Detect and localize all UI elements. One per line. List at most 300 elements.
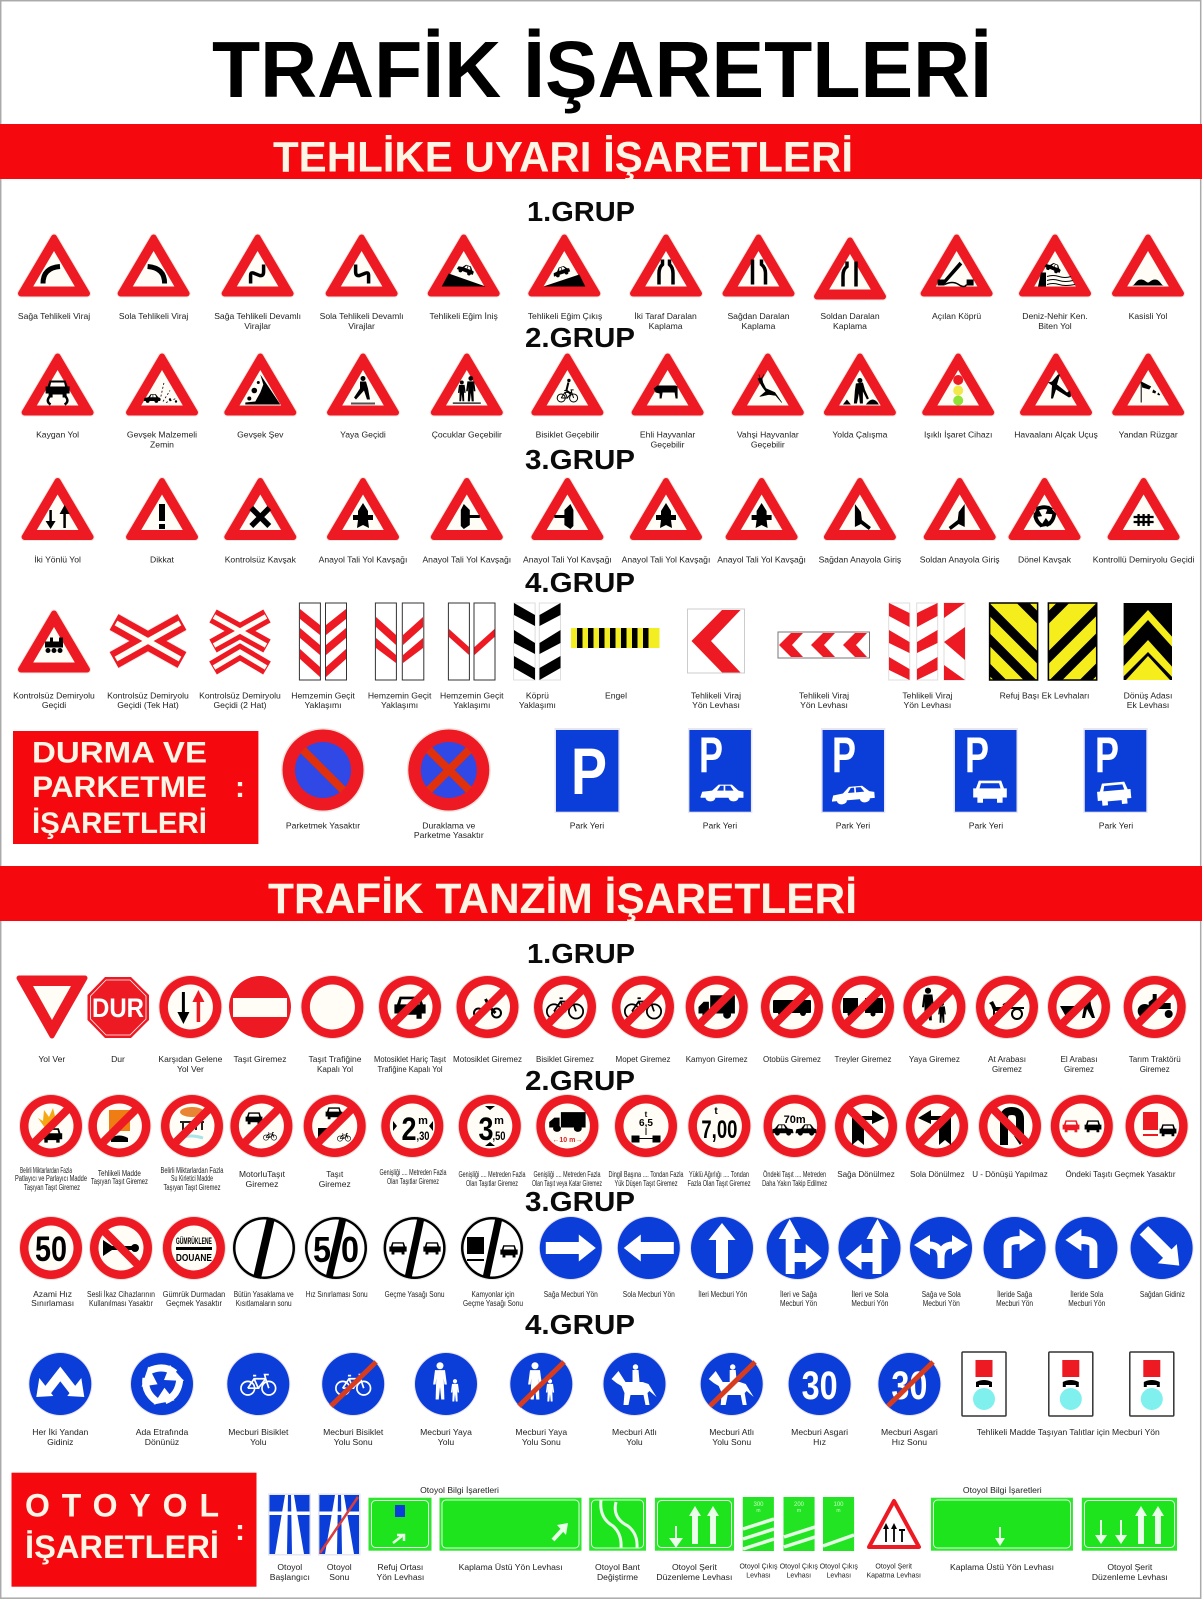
sign: Öndeki Taşıtı Geçmek Yasaktır (2) [1125,1094,1189,1158]
sign: Tehlikeli Eğim İniş: Tehlikeli Eğim İniş [430,311,498,321]
heading: 3.GRUP: 3.GRUP [525,444,635,475]
sign: Mecburi Asgari Hız Sonu [877,1352,941,1447]
sign: Mopet Giremez: Mopet Giremez [616,1054,670,1064]
sign: Sesli İkaz Cihazları Yasak: Sesli İkaz Cihazlarının [87,1289,155,1299]
sign: Sağa Tehlikeli Devamlı Virajlar [214,238,301,331]
sign: Otoyol Çıkış Levhası 200 m: Levhası [787,1572,811,1580]
sign: At Arabası Giremez: At Arabası [988,1054,1026,1064]
sign: Motosiklet Giremez [453,975,522,1064]
sign: Yüksekliği 3,50 m: 3 [478,1111,494,1147]
sign: Yüksekliği 3,50 m [458,1094,526,1188]
sign: Park Yeri, P only [554,728,620,830]
sign: Tarım Traktörü Giremez: Tarım Traktörü [1129,1054,1181,1064]
sign: Açılan Köprü: Açılan Köprü [932,311,981,321]
sign: Uzunluğu 10 m: ←10 m→ [552,1137,582,1144]
sign: Bütün Yasaklama ve Kısıtlamaların Sonu [232,1216,296,1308]
sign: İleride Sağa Mecburi Yön [983,1216,1047,1308]
sign: Soldan Daralan Kaplama: Soldan Daralan [820,311,880,321]
sign: Anayol Tali Yol Kavşağı: Anayol Tali Yol Kavşağı [622,554,710,564]
sign: Gevşek Malzemeli Zemin: Zemin [150,440,174,450]
sign: Gevşek Şev [227,356,293,440]
sign: İleri ve Sağa Mecburi Yön: İleri ve Sağa [780,1289,817,1299]
sign: Mecburi Asgari Hız: 30 [802,1364,838,1408]
sign: Patlayıcı ve Parlayıcı Madde: Taşıyan Taşıt Giremez [24,1183,80,1192]
sign: Otoyol Sonu: Sonu [329,1572,350,1582]
sign: Motosiklet Hariç Taşıt Trafiğine Kapalı Yol: Motosiklet Hariç Taşıt [374,1054,447,1064]
sign: Kamyonlar için Geçme Yasağı Sonu [460,1216,524,1308]
sign: Otoyol Çıkış Levhası 100 m: m [836,1508,841,1514]
sign: Kontrolsüz Demiryolu Geçidi: Geçidi [42,700,66,710]
sign: Her İki Yandan Gidiniz [28,1352,92,1447]
sign: Otoyol Çıkış Levhası 300 m: m [756,1508,761,1514]
sign: Parketmek Yasaktır [281,728,365,830]
sign: Mecburi Atlı Yolu Sonu [700,1352,764,1447]
banner: Tehlike Uyarı İşaretleri [0,124,1202,182]
sign: Hız Sınırlaması Sonu: Hız Sınırlaması Sonu [306,1289,368,1299]
sign: Park Yeri, car side tilted: P [832,727,856,783]
sign: Otoyol Şerit Düzenleme Levhası, right [1082,1498,1177,1582]
sign: Yolda Çalışma [827,356,893,440]
sign: Tehlikeli Viraj Yön Levhası, vertical [889,603,965,710]
sign: Karşıdan Gelene Yol Ver [158,975,223,1074]
sign: Kontrolsüz Kavşak: Kontrolsüz Kavşak [225,554,297,564]
sign: Dur: DUR [92,993,144,1023]
sign: Sağa Dönülmez [834,1094,898,1179]
sign: İki Yönlü Yol: İki Yönlü Yol [34,554,81,564]
sign: Duraklama ve Parketme Yasaktır [407,728,491,840]
sign: Sola Dönülmez [905,1094,969,1179]
sign: Karşıdan Gelene Yol Ver: Yol Ver [177,1064,204,1074]
sign: Gümrük Durmadan Geçmek Yasaktır [162,1216,226,1308]
sign: Sola Dönülmez: Sola Dönülmez [910,1169,965,1179]
sign: Tarım Traktörü Giremez [1123,975,1187,1074]
sign: Sola Tehlikeli Devamlı Virajlar: Virajlar [348,321,375,331]
sign: Kontrollü Demiryolu Geçidi: Kontrollü Demiryolu Geçidi [1093,554,1195,564]
heading: 4.GRUP: 4.GRUP [525,567,635,598]
sign: Anayol Tali Yol Kavşağı: Anayol Tali Yol Kavşağı [717,554,806,564]
sign: Sağdan Gidiniz: Sağdan Gidiniz [1140,1289,1185,1299]
sign: Kontrolsüz Demiryolu Geçidi [13,614,95,710]
sign: Anayol Tali Yol Kavşağı [319,481,407,564]
label: Otoyol Bilgi İşaretleri: Otoyol Bilgi İşaretleri [420,1485,499,1495]
sign: Kaygan Yol: Kaygan Yol [36,430,79,440]
sign: Hemzemin Geçit Yaklaşımı, 1 stripe: Yaklaşımı [453,700,490,710]
sign: Mecburi Atlı Yolu Sonu: Yolu Sonu [712,1437,751,1447]
sign: Ehli Hayvanlar Geçebilir: Ehli Hayvanlar [640,430,695,440]
sign: Parketmek Yasaktır: Parketmek Yasaktır [286,820,360,830]
sign: Tehlikeli Viraj Yön Levhası, wide: Yön Levhası [800,700,848,710]
sign: Yaya Giremez: Yaya Giremez [909,1054,960,1064]
sign: Her İki Yandan Gidiniz: Gidiniz [47,1437,73,1447]
sign: Otoyol Sonu [318,1494,360,1582]
sign: Uzunluğu 10 m: Genişliği .... Metreden Fazla [534,1170,601,1179]
sign: İki Taraf Daralan Kaplama: Kaplama [649,321,683,331]
sign: Yaya Geçidi: Yaya Geçidi [340,430,386,440]
sign: At Arabası Giremez [975,975,1039,1074]
sign: Sağdan Daralan Kaplama: Kaplama [742,321,776,331]
heading: 1.GRUP: 1.GRUP [527,938,635,969]
sign: Motorlu Taşıt Giremez: MotorluTaşıt [239,1169,286,1179]
sign: Deniz-Nehir Ken. Biten Yol: Biten Yol [1038,321,1072,331]
sign: Park Yeri, P only: Park Yeri [570,820,604,830]
sign: Sağa ve Sola Mecburi Yön: Sağa ve Sola [922,1289,961,1299]
sign: Bisiklet Giremez [533,975,597,1064]
sign: Mecburi Bisiklet Yolu Sonu: Yolu Sonu [334,1437,373,1447]
sign: Patlayıcı ve Parlayıcı Madde [15,1094,87,1192]
sign: Mecburi Yaya Yolu: Mecburi Yaya [420,1427,472,1437]
sign: İleri Mecburi Yön: İleri Mecburi Yön [698,1289,747,1299]
sign: Tarım Traktörü Giremez: Giremez [1140,1064,1170,1074]
sign: Ehli Hayvanlar Geçebilir [635,356,701,450]
sign: Deniz-Nehir Ken. Biten Yol [1022,238,1088,331]
sign: Mecburi Yaya Yolu Sonu: Mecburi Yaya [515,1427,567,1437]
sign: Mecburi Bisiklet Yolu Sonu [321,1352,385,1447]
sign: Otoyol Çıkış Levhası 200 m: Otoyol Çıkış [780,1564,818,1570]
sign: Refüj Ortası Yön Levhası [368,1498,432,1582]
sign: Mecburi Yaya Yolu Sonu [509,1352,573,1447]
sign: Dingil Başına 6,5 t: Dingil Başına .... Tondan Fazla [608,1170,684,1179]
sign: Kasisli Yol [1115,238,1181,321]
sign: Havaalanı Alçak Uçuş [1014,356,1098,440]
sign: Kontrolsüz Demiryolu Geçidi (Tek Hat): Kontrolsüz Demiryolu [107,690,189,700]
sign: Köprü Yaklaşımı: Köprü [526,690,549,700]
sign: Yüklü Ağırlığı 7,00 t [687,1094,751,1188]
sign: Otoyol Çıkış Levhası 300 m: Otoyol Çıkış [739,1564,778,1570]
sign: Otoyol Sonu: Otoyol [327,1562,352,1572]
sign: Taşıt Giremez: Taşıt Giremez [234,1054,286,1064]
sign: Yandan Rüzgar [1115,356,1181,440]
sign: Refuj Başı Ek Levhaları [988,602,1098,700]
sign: Bisiklet Geçebilir [534,356,600,440]
sign: Patlayıcı ve Parlayıcı Madde: Belirli Miktarlardan Fazla [20,1166,72,1175]
sign: Yandan Rüzgar: Yandan Rüzgar [1119,430,1178,440]
sign: Motosiklet Hariç Taşıt Trafiğine Kapalı Yol: Trafiğine Kapalı Yol [378,1064,443,1074]
sign: Treyler Giremez [831,975,895,1064]
sign: Otoyol Çıkış Levhası 300 m [739,1497,778,1580]
sign: Takip mesafesi 70 m [762,1094,827,1188]
sign: Azami Hız Sınırlaması: Azami Hız [33,1289,72,1299]
sign: Bisiklet Giremez: Bisiklet Giremez [536,1054,594,1064]
heading: 2.GRUP: 2.GRUP [525,322,635,353]
panel: Durma ve Parketme İşaretleri: DURMA VE [32,737,207,770]
sign: Yol Ver [19,978,85,1064]
sign: Park Yeri, car front tilted: Park Yeri [1099,820,1133,830]
sign: Su Kirletici Madde [160,1094,224,1192]
sign: Otoyol Çıkış Levhası 200 m [780,1497,818,1580]
sign: İleri Mecburi Yön [690,1216,754,1299]
sign: Genişliği 2,30 m: m [418,1115,428,1127]
sign: Kontrollü Demiryolu Geçidi [1093,481,1195,564]
sign: Hemzemin Geçit Yaklaşımı, 3 stripes [291,603,355,710]
sign: Anayol Tali Yol Kavşağı: Anayol Tali Yol Kavşağı [523,554,612,564]
sign: Sağa Mecburi Yön [539,1216,603,1299]
sign: Kontrolsüz Demiryolu Geçidi (2 Hat): Kontrolsüz Demiryolu [199,690,281,700]
sign: Park Yeri, car side tilted: Park Yeri [836,820,870,830]
sign: Kontrolsüz Demiryolu Geçidi (Tek Hat): Geçidi (Tek Hat) [117,700,179,710]
sign: Sağdan Daralan Kaplama: Sağdan Daralan [727,311,790,321]
sign: Kontrolsüz Demiryolu Geçidi (Tek Hat) [107,622,189,710]
sign: Kamyonlar için Geçme Yasağı Sonu: Geçme Yasağı Sonu [463,1298,523,1308]
sign: Hız Sınırlaması Sonu: 0 [341,1229,359,1270]
sign: Yüklü Ağırlığı 7,00 t: Yüklü Ağırlığı .... Tondan [689,1170,749,1179]
sign: Taşıt Giremez, with tractor: Taşıt [326,1169,344,1179]
sign: Kontrolsüz Demiryolu Geçidi: Kontrolsüz Demiryolu [13,690,95,700]
sign: Taşıt Giremez, with tractor [303,1094,367,1189]
sign: Çocuklar Geçebilir [432,356,502,440]
sign: Mecburi Asgari Hız [788,1352,852,1447]
sign: Vahşi Hayvanlar Geçebilir: Vahşi Hayvanlar [737,430,799,440]
sign: Çocuklar Geçebilir: Çocuklar Geçebilir [432,430,502,440]
sign: Yüksekliği 3,50 m: Olan Taşıtlar Giremez [466,1179,518,1188]
panel: Otoyol İşaretleri: OTOYOL [25,1488,219,1524]
sign: Deniz-Nehir Ken. Biten Yol: Deniz-Nehir Ken. [1022,311,1088,321]
panel: Durma ve Parketme İşaretleri: İŞARETLERİ [32,807,207,840]
sign: Kontrolsüz Demiryolu Geçidi (2 Hat): Geçidi (2 Hat) [213,700,267,710]
sign: Gevşek Malzemeli Zemin [127,356,197,450]
sign: El Arabası Giremez: El Arabası [1060,1054,1098,1064]
sign: Refuj Başı Ek Levhaları: Refuj Başı Ek Levhaları [1000,690,1089,700]
sign: Duraklama ve Parketme Yasaktır: Parketme Yasaktır [414,830,484,840]
sign: İleride Sağa Mecburi Yön: İleride Sağa [997,1289,1032,1299]
sign: Dingil Başına 6,5 t [608,1094,684,1188]
sign: Tehlikeli Madde Taşıyan Taşıt Giremez: Taşıyan Taşıt Giremez [91,1177,148,1186]
sign: Otoyol Başlangıcı: Otoyol [277,1562,302,1572]
sign: Yaya Geçidi [330,356,396,440]
sign: Öndeki Taşıtı Geçmek Yasaktır (1): Öndeki Taşıtı Geçmek Yasaktır [1066,1169,1176,1179]
sign: Kontrolsüz Kavşak [225,481,297,564]
sign: Mecburi Asgari Hız: Mecburi Asgari [791,1427,848,1437]
sign: Köprü Yaklaşımı: Yaklaşımı [519,700,556,710]
banner: Trafik Tanzim İşaretleri: TRAFİK TANZİM İŞARETLERİ [268,875,857,923]
banner: Trafik Tanzim İşaretleri [0,866,1202,923]
sign: Genişliği 2,30 m: 2 [402,1111,416,1147]
sign: Sağa Tehlikeli Devamlı Virajlar: Virajlar [244,321,271,331]
sign: Mecburi Bisiklet Yolu [226,1352,290,1447]
sign: Dönüş Adası Ek Levhası [1124,603,1172,708]
sign: Sağa ve Sola Mecburi Yön [909,1216,973,1308]
sign: İki Taraf Daralan Kaplama: İki Taraf Daralan [634,311,697,321]
title: TRAFİK İŞARETLERİ [212,25,992,114]
sign: Taşıt Trafiğine Kapalı Yol: Kapalı Yol [317,1064,353,1074]
sign: Sağa ve Sola Mecburi Yön: Mecburi Yön [923,1298,960,1308]
sign: Mecburi Atlı Yolu: Mecburi Atlı [612,1427,657,1437]
sign: Vahşi Hayvanlar Geçebilir [735,356,801,450]
sign: Soldan Anayola Giriş: Soldan Anayola Giriş [920,554,1000,564]
sign: Mecburi Bisiklet Yolu: Mecburi Bisiklet [228,1427,289,1437]
panel: Durma ve Parketme İşaretleri: PARKETME [32,771,207,804]
sign: Dikkat: Dikkat [150,554,175,564]
sign: Bütün Yasaklama ve Kısıtlamaların Sonu: Kısıtlamaların sonu [236,1298,292,1308]
sign: Mecburi Atlı Yolu [602,1352,666,1447]
sign: Park Yeri, car front: Park Yeri [969,820,1003,830]
sign: Otoyol Şerit Düzenleme Levhası: Otoyol Şerit [672,1562,717,1572]
sign: Anayol Tali Yol Kavşağı [717,481,806,564]
sign: Tehlikeli Eğim Çıkış: Tehlikeli Eğim Çıkış [528,311,602,321]
sign: Otoyol Çıkış Levhası 100 m [820,1497,858,1580]
sign: Otoyol Çıkış Levhası 200 m: m [797,1508,801,1514]
sign: Sola Tehlikeli Devamlı Virajlar [320,238,404,331]
sign: İleri ve Sağa Mecburi Yön [766,1216,830,1308]
sign: Sola Tehlikeli Viraj [119,238,188,321]
sign: İleride Sola Mecburi Yön: İleride Sola [1070,1289,1103,1299]
sign: Engel: Engel [605,690,627,700]
sign: Tehlikeli Viraj Yön Levhası [688,609,744,710]
sign: Otoyol Başlangıcı: Başlangıcı [270,1572,310,1582]
sign: Sağa Dönülmez: Sağa Dönülmez [837,1169,895,1179]
sign: Sesli İkaz Cihazları Yasak [87,1216,155,1308]
sign: Kontrolsüz Demiryolu Geçidi (2 Hat) [199,616,281,710]
sign: Sesli İkaz Cihazları Yasak: Kullanılması Yasaktır [89,1298,153,1308]
sign: Kamyonlar için Geçme Yasağı Sonu: Kamyonlar için [472,1289,515,1299]
sign: Tehlikeli Eğim Çıkış [528,238,602,321]
sign: Tehlikeli Viraj Yön Levhası: Tehlikeli Viraj [691,690,741,700]
sign: Yaya Giremez [902,975,966,1064]
signs: Tehlikeli Madde Taşıyan Talıtlar için Mecburi Yön: Tehlikeli Madde Taşıyan Talıtlar için Mecburi Yön [977,1427,1160,1437]
sign: Soldan Daralan Kaplama [817,240,883,331]
sign: El Arabası Giremez [1047,975,1111,1074]
sign: Yüksekliği 3,50 m: Genişliği .... Metreden Fazla [458,1170,526,1179]
sign: Motorlu Taşıt Giremez [229,1094,293,1189]
sign: Kaplama Üstü Yön Levhası [440,1498,582,1572]
sign: Tehlikeli Viraj Yön Levhası, vertical: Yön Levhası [904,700,951,710]
sign: Su Kirletici Madde: Belirli Miktarlardan Fazla [160,1166,224,1175]
sign: Hız Sınırlaması Sonu [304,1216,368,1299]
sign: U-Dönüşü Yapılmaz: U - Dönüşü Yapılmaz [972,1169,1048,1179]
sign: Sağa Tehlikeli Devamlı Virajlar: Sağa Tehlikeli Devamlı [214,311,301,321]
sign: Refüj Ortası Yön Levhası: Yön Levhası [377,1572,424,1582]
heading: 1.GRUP: 1.GRUP [527,196,635,227]
sign: Otoyol Bant Değiştirme: Değiştirme [597,1572,638,1582]
sign: Yüklü Ağırlığı 7,00 t: 7,00 [701,1116,737,1144]
sign: Mecburi Asgari Hız Sonu: Mecburi Asgari [881,1427,938,1437]
sign: Dikkat [129,481,195,564]
sign: Anayol Tali Yol Kavşağı [622,481,710,564]
sign: Kaplama Üstü Yön Levhası, right [931,1498,1073,1572]
sign: Bisiklet Geçebilir: Bisiklet Geçebilir [536,430,599,440]
sign: Azami Hız Sınırlaması: Sınırlaması [31,1298,74,1308]
sign: Ehli Hayvanlar Geçebilir: Geçebilir [651,440,685,450]
sign: Otoyol Bant Değiştirme [589,1498,646,1582]
sign: Karşıdan Gelene Yol Ver: Karşıdan Gelene [158,1054,223,1064]
sign: Ada Etrafında Dönünüz: Ada Etrafında [136,1427,188,1437]
sign: Dönel Kavşak [1012,481,1078,564]
sign: Azami Hız Sınırlaması [19,1216,83,1308]
sign: Sağa Tehlikeli Viraj [18,238,90,321]
sign: Tehlikeli Eğim İniş [430,238,498,321]
sign: Kamyon Giremez [685,975,749,1064]
heading: 2.GRUP: 2.GRUP [525,1065,635,1096]
sign: Takip mesafesi 70 m: 70m [784,1114,806,1126]
sign: Mecburi Yaya Yolu: Yolu [438,1437,454,1447]
sign: Bütün Yasaklama ve Kısıtlamaların Sonu: Bütün Yasaklama ve [234,1289,294,1299]
sign: Engel [571,628,660,700]
sign: Otoyol Şerit Düzenleme Levhası, right: Düzenleme Levhası [1092,1572,1168,1582]
sign: Yüklü Ağırlığı 7,00 t: t [714,1106,718,1117]
sign: Işıklı İşaret Cihazı [924,356,992,440]
sign: Her İki Yandan Gidiniz: Her İki Yandan [32,1427,89,1437]
sign: Motosiklet Giremez: Motosiklet Giremez [453,1054,522,1064]
sign: Dingil Başına 6,5 t: Yük Düşen Taşıt Giremez [614,1179,678,1188]
sign: Hemzemin Geçit Yaklaşımı, 1 stripe: Hemzemin Geçit [440,690,504,700]
sign: Otoyol Şerit Kapatma Levhası [866,1501,921,1580]
sign: Kamyon Giremez: Kamyon Giremez [686,1054,748,1064]
sign: Mecburi Asgari Hız: Hız [813,1437,826,1447]
sign: Mecburi Yaya Yolu [414,1352,478,1447]
sign: Mecburi Atlı Yolu Sonu: Mecburi Atlı [709,1427,754,1437]
sign: Refüj Ortası Yön Levhası: Refuj Ortası [377,1562,423,1572]
sign: Yol Ver: Yol Ver [38,1054,65,1064]
sign: Otoyol Şerit Düzenleme Levhası [655,1498,734,1582]
sign: Gümrük Durmadan Geçmek Yasaktır: DOUANE [176,1253,212,1264]
sign: Park Yeri, car side [688,727,752,830]
sign: Anayol Tali Yol Kavşağı: Anayol Tali Yol Kavşağı [319,554,407,564]
sign: Otoyol Çıkış Levhası 100 m: Otoyol Çıkış [820,1564,858,1570]
sign: Vahşi Hayvanlar Geçebilir: Geçebilir [751,440,785,450]
sign: Dönel Kavşak: Dönel Kavşak [1018,554,1072,564]
sign: Taşıt Giremez [229,976,291,1064]
panel: Otoyol İşaretleri [12,1473,256,1587]
sign: Tehlikeli Madde Taşıyan Taşıt Giremez [87,1094,151,1186]
sign: Otobüs Giremez [760,975,824,1064]
label: Otoyol Bilgi İşaretleri: Otoyol Bilgi İşaretleri [963,1485,1042,1495]
sign: El Arabası Giremez: Giremez [1064,1064,1094,1074]
sign: Park Yeri, car side: P [699,727,723,783]
sign: Sağdan Daralan Kaplama [726,238,792,331]
sign: Gümrük Durmadan Geçmek Yasaktır: GÜMRÜKLENE [176,1236,212,1246]
sign: Mecburi Bisiklet Yolu: Yolu [250,1437,267,1447]
sign: Dur: Dur [111,1054,125,1064]
sign: Sola Tehlikeli Viraj: Sola Tehlikeli Viraj [119,311,188,321]
sign: Su Kirletici Madde: Taşıyan Taşıt Giremez [164,1183,220,1192]
heading: 3.GRUP: 3.GRUP [525,1186,635,1217]
sign: Otoyol Çıkış Levhası 100 m: Levhası [827,1572,851,1580]
sign: Geçme Yasağı Sonu: Geçme Yasağı Sonu [385,1289,445,1299]
sign: Dönüş Adası Ek Levhası: Ek Levhası [1127,700,1169,710]
sign: Genişliği 2,30 m: Genişliği .... Metreden Fazla [380,1168,447,1177]
sign: Otoyol Çıkış Levhası 100 m: 100 [833,1502,844,1508]
sign: İleride Sola Mecburi Yön: Mecburi Yön [1068,1298,1105,1308]
sign: Park Yeri, car front tilted: P [1095,727,1119,783]
sign: Takip mesafesi 70 m: Öndeki Taşıt .... Metreden [763,1170,826,1179]
sign: Gümrük Durmadan Geçmek Yasaktır: Gümrük Durmadan [163,1289,225,1299]
sign: Kaplama Üstü Yön Levhası, right: Kaplama Üstü Yön Levhası [950,1562,1054,1572]
sign: Park Yeri, P only: P [571,734,607,808]
sign: Hemzemin Geçit Yaklaşımı, 1 stripe [440,603,504,710]
sign: İki Yönlü Yol [25,481,91,564]
sign: Park Yeri, car front [954,727,1018,830]
sign: Hemzemin Geçit Yaklaşımı, 3 stripes: Hemzemin Geçit [291,690,355,700]
sign: Park Yeri, car front: P [965,727,989,783]
sign: Otoyol Şerit Kapatma Levhası: Otoyol Şerit [875,1564,912,1570]
sign: Köprü Yaklaşımı [514,603,560,710]
heading: 4.GRUP: 4.GRUP [525,1309,635,1340]
signs: Tehlikeli Madde Taşıyan Talıtlar için Mecburi Yön [962,1352,1174,1437]
sign: Havaalanı Alçak Uçuş: Havaalanı Alçak Uçuş [1014,430,1098,440]
sign: Su Kirletici Madde: Su Kirletici Madde [171,1174,213,1183]
sign: Tehlikeli Viraj Yön Levhası: Yön Levhası [692,700,740,710]
sign: Otoyol Şerit Kapatma Levhası: Kapatma Levhası [866,1572,921,1580]
sign: İleride Sola Mecburi Yön [1054,1216,1118,1308]
sign: Mecburi Asgari Hız Sonu: Hız Sonu [892,1437,927,1447]
sign: Otoyol Şerit Düzenleme Levhası: Düzenleme Levhası [656,1572,732,1582]
sign: Sağdan Anayola Giriş: Sağdan Anayola Giriş [819,554,901,564]
sign: Anayol Tali Yol Kavşağı: Anayol Tali Yol Kavşağı [422,554,511,564]
sign: Otoyol Çıkış Levhası 300 m: 300 [753,1502,764,1508]
sign: Hemzemin Geçit Yaklaşımı, 2 stripes: Yaklaşımı [381,700,418,710]
sign: Uzunluğu 10 m: Olan Taşıt veya Katar Giremez [532,1179,602,1188]
sign: Kaygan Yol [25,356,91,440]
sign: Otoyol Çıkış Levhası 300 m: Levhası [746,1572,771,1580]
